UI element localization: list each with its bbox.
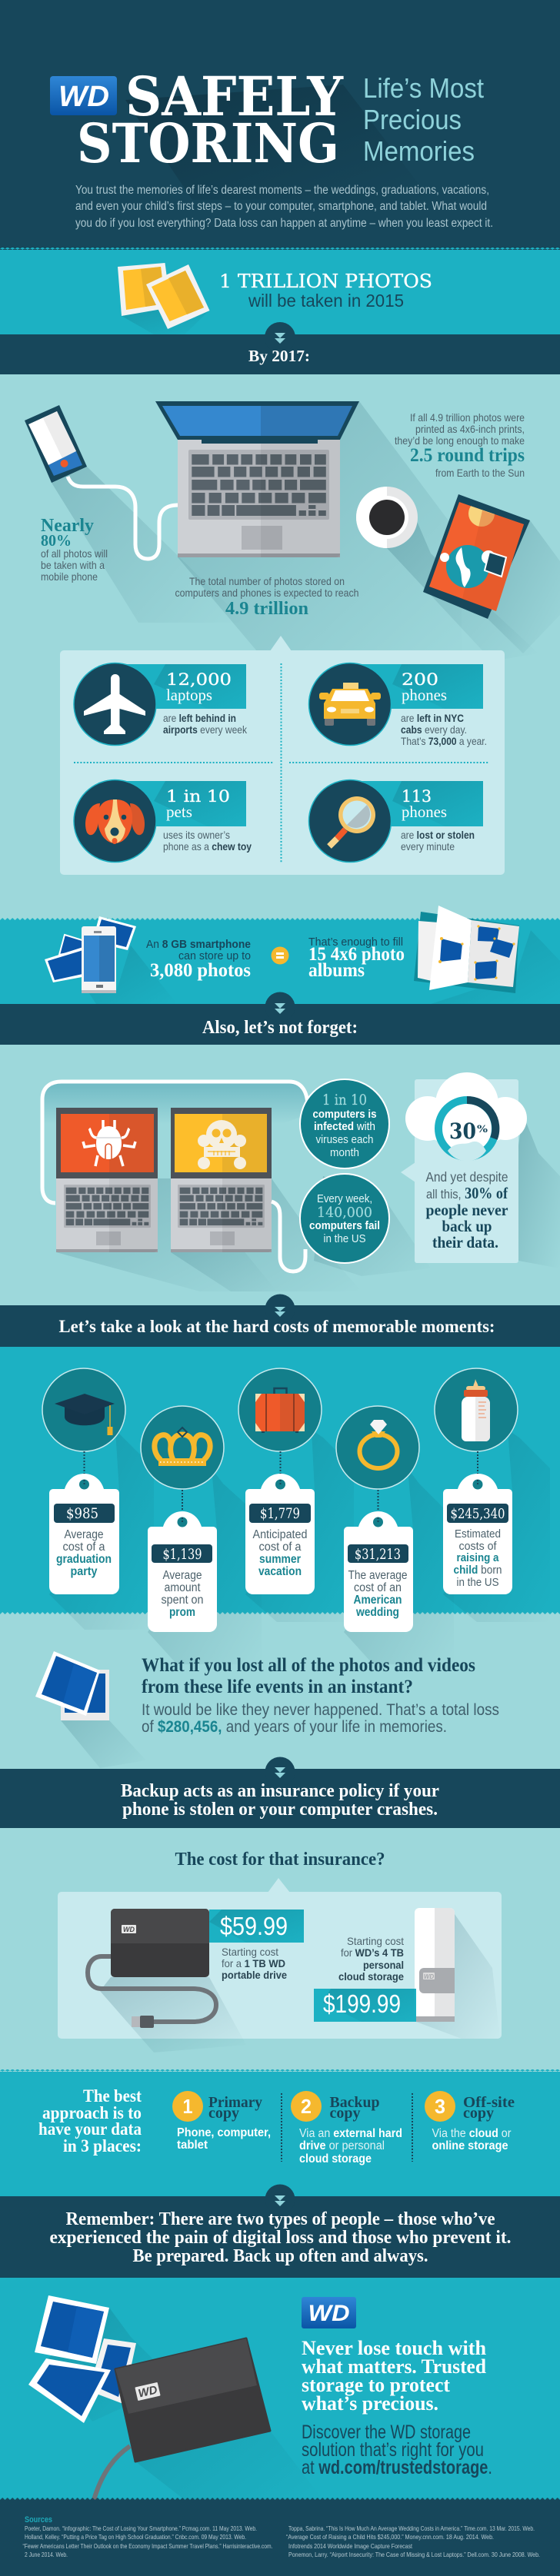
panel: remember band: experienced the pain of digital loss and those who prevent it. bbox=[49, 2228, 511, 2248]
text: total loss: It would be like they never happened. That’s a total loss bbox=[142, 1701, 499, 1719]
panel: sources footer: “Average Cost of Raising a Child Hits $245,000.” Money.cnn.com. 18 Aug. 2014. Web. bbox=[286, 2533, 494, 2541]
text: 3,080 photos: can store up to bbox=[178, 950, 251, 962]
callout: 1 in 10 computers: 1 in 10 bbox=[322, 1092, 367, 1109]
icon: stacked photos bbox=[35, 1651, 109, 1720]
heading: never lose touch: storage to protect bbox=[302, 2374, 450, 2396]
subtitle: Precious bbox=[363, 104, 462, 135]
icon: graduation cap bbox=[55, 1394, 115, 1435]
step: backup copy: cloud storage bbox=[299, 2152, 372, 2166]
panel: backup insurance band: Backup acts as an insurance policy if your bbox=[121, 1781, 439, 1801]
text: 15 photo albums: That’s enough to fill bbox=[308, 936, 403, 949]
price tag: in the US bbox=[457, 1576, 498, 1589]
icon: plane bbox=[84, 674, 145, 734]
stat: laptops at airports: airports every week bbox=[163, 723, 248, 736]
icon: cloud with donut bbox=[405, 1072, 527, 1161]
panel: closing call to action bbox=[0, 2278, 560, 2500]
panel: cost for insurance bbox=[0, 1828, 560, 2072]
price tag bbox=[344, 1511, 413, 1632]
callout: 1 in 10 computers: month bbox=[330, 1146, 359, 1159]
heading: what if: What if you lost all of the photos and videos bbox=[142, 1655, 475, 1676]
callout: 140,000 computers: computers fail bbox=[309, 1219, 380, 1232]
price tag: cost of a bbox=[63, 1541, 105, 1554]
callout: 1 in 10 computers bbox=[300, 1079, 389, 1168]
cable frame bbox=[42, 1082, 308, 1203]
icon: personal cloud: WD bbox=[424, 1973, 434, 1980]
icon: smartphone with photos bbox=[45, 916, 136, 993]
step: off-site copy: online storage bbox=[432, 2139, 508, 2152]
panel: sources footer: Sources bbox=[25, 2515, 52, 2524]
text: round trips bbox=[395, 411, 525, 479]
cost: graduation party bbox=[42, 1368, 154, 1630]
text: round trips: from Earth to the Sun bbox=[435, 467, 525, 479]
step: primary copy: copy bbox=[208, 2105, 239, 2122]
text: 15 photo albums: 15 4x6 photo bbox=[308, 944, 405, 965]
stat: lost phones: are lost or stolen bbox=[401, 829, 475, 841]
panel: header bbox=[50, 65, 493, 230]
panel: sources footer: Holland, Kelley. “Putting a Price Tag on High School Graduation.” Cnbc.com. 09 May 2013. Web. bbox=[25, 2533, 246, 2541]
stat: laptops at airports: 12,000 bbox=[166, 670, 232, 689]
text: discover: solution that’s right for you bbox=[302, 2439, 484, 2461]
callout: 30 percent never back up: 30 bbox=[449, 1118, 476, 1144]
icon: portable drive bbox=[88, 1909, 216, 2028]
subtitle: Life’s Most bbox=[363, 72, 484, 104]
icon: portable drive large: WD bbox=[137, 2383, 158, 2401]
callout: 30 percent never back up: And yet despite bbox=[426, 1169, 508, 1185]
callout: 30 percent never back up: all this, 30% of bbox=[426, 1184, 508, 1202]
text: 3,080 photos: An 8 GB smartphone bbox=[146, 939, 251, 951]
panel: hard costs heading band: Let’s take a look at the hard costs of memorable moments: bbox=[58, 1317, 495, 1336]
text: 80 percent: of all photos will bbox=[41, 547, 108, 560]
callout: 1 in 10 computers: computers is bbox=[312, 1108, 377, 1121]
price tag: wedding bbox=[355, 1606, 399, 1619]
stat: lost phones: phones bbox=[402, 803, 447, 821]
cost: American wedding bbox=[336, 1406, 454, 1664]
text: discover: at wd.com/trustedstorage. bbox=[302, 2457, 492, 2478]
heading: never lose touch: what matters. Trusted bbox=[302, 2355, 487, 2378]
step: backup copy: Backup bbox=[329, 2094, 380, 2111]
callout: 140,000 computers: 140,000 bbox=[317, 1205, 372, 1221]
step: primary copy: Primary bbox=[208, 2094, 262, 2111]
callout: 140,000 computers: Every week, bbox=[317, 1192, 372, 1205]
step: off-site copy: 3 bbox=[435, 2095, 445, 2118]
icon: laptop bbox=[155, 401, 359, 557]
heading: best approach bbox=[38, 2086, 142, 2156]
panel: remember band: Remember: There are two types of people – those who’ve bbox=[66, 2209, 495, 2229]
icon: magnifier bbox=[329, 796, 375, 846]
panel: remember band: Be prepared. Back up often and always. bbox=[132, 2246, 428, 2266]
stat: laptops at airports bbox=[74, 663, 248, 746]
icon: phone bbox=[25, 405, 87, 483]
heading: never lose touch: what’s precious. bbox=[302, 2392, 438, 2415]
text: total loss: of $280,456, and years of your life in memories. bbox=[142, 1718, 447, 1736]
price tag: Estimated bbox=[455, 1527, 501, 1541]
icon: crown bbox=[155, 1428, 210, 1466]
callout: 140,000 computers bbox=[300, 1174, 389, 1263]
stat: phones in cabs: 200 bbox=[402, 670, 438, 689]
text: 4.9 trillion: computers and phones is expected to reach bbox=[175, 587, 358, 599]
panel: also lets not forget heading band: Also, let’s not forget: bbox=[202, 1018, 358, 1038]
stat: pets bbox=[74, 779, 252, 863]
price: 199.99: for WD’s 4 TB bbox=[341, 1946, 404, 1959]
panel: also lets not forget heading band bbox=[0, 992, 560, 1045]
price tag: vacation bbox=[258, 1565, 302, 1578]
icon: tablet bbox=[423, 494, 530, 619]
heading: 1 trillion photos: 1 TRILLION PHOTOS bbox=[219, 271, 432, 292]
step: backup copy: copy bbox=[329, 2105, 360, 2122]
step: primary copy: 1 bbox=[183, 2095, 192, 2118]
text: 4.9 trillion: 4.9 trillion bbox=[225, 599, 308, 619]
stat: phones in cabs bbox=[309, 663, 487, 747]
icon: polaroid photos bbox=[118, 263, 209, 329]
price: 199.99: $199.99 bbox=[323, 1989, 401, 2018]
price tag: $985 bbox=[66, 1505, 98, 1522]
icon: portable drive: WD bbox=[123, 1926, 135, 1933]
stat: laptops at airports: are left behind in bbox=[163, 712, 236, 724]
panel: viruses and failures section bbox=[0, 1045, 560, 1305]
step: backup copy: 2 bbox=[301, 2095, 312, 2118]
stat: pets: 1 in 10 bbox=[166, 787, 230, 806]
callout: 30 percent never back up: people never bbox=[426, 1201, 508, 1219]
price tag: costs of bbox=[458, 1540, 497, 1553]
cost: raising a child bbox=[435, 1368, 550, 1622]
text: 3,080 photos: 3,080 photos bbox=[150, 960, 251, 981]
icon: photos bbox=[28, 2295, 136, 2423]
icon: laptop with skull bbox=[171, 1108, 272, 1252]
panel: hard costs bbox=[0, 1347, 560, 1860]
step: off-site copy bbox=[425, 2091, 515, 2152]
stat: phones in cabs: That’s 73,000 a year. bbox=[401, 735, 487, 747]
callout: 30 percent never back up: back up bbox=[442, 1217, 492, 1235]
price tag bbox=[49, 1474, 119, 1594]
price tag: graduation bbox=[56, 1553, 112, 1566]
arrow connector 1 bbox=[265, 322, 295, 353]
price tag: amount bbox=[165, 1581, 201, 1594]
subtitle: Memories bbox=[363, 135, 475, 167]
heading: best approach: approach is to bbox=[42, 2103, 142, 2122]
panel: sources footer bbox=[0, 2498, 560, 2576]
callout: 140,000 computers: in the US bbox=[323, 1232, 366, 1245]
price tag: cost of an bbox=[354, 1581, 402, 1594]
step: primary copy bbox=[172, 2091, 271, 2152]
heading: best approach: have your data bbox=[38, 2119, 142, 2139]
step: primary copy: Phone, computer, bbox=[177, 2126, 271, 2139]
text: 80 percent: be taken with a bbox=[41, 559, 105, 571]
price: 199.99: cloud storage bbox=[338, 1970, 404, 1983]
price: 59.99: $59.99 bbox=[220, 1912, 288, 1940]
WD logo small: WD bbox=[308, 2301, 349, 2326]
WD logo: WD bbox=[58, 81, 109, 113]
price: 199.99 bbox=[314, 1935, 416, 2022]
price: 199.99: Starting cost bbox=[347, 1935, 404, 1947]
panel: sources footer: Infotrends 2014 Worldwide Image Capture Forecast bbox=[288, 2542, 413, 2550]
panel: backup insurance band: phone is stolen or your computer crashes. bbox=[122, 1800, 438, 1820]
price tag: $31,213 bbox=[355, 1546, 401, 1563]
text: 80 percent: Nearly bbox=[41, 516, 94, 536]
callout: 1 in 10 computers: infected with bbox=[314, 1120, 375, 1133]
cost: prom bbox=[141, 1406, 262, 1664]
heading: what if bbox=[142, 1655, 475, 1697]
cable bbox=[68, 477, 178, 559]
step: backup copy bbox=[291, 2091, 402, 2166]
price tag: The average bbox=[348, 1569, 408, 1582]
stat: phones in cabs: phones bbox=[402, 686, 447, 704]
text: 4.9 trillion: The total number of photos stored on bbox=[189, 575, 345, 587]
callout: 30 percent never back up: their data. bbox=[432, 1233, 498, 1251]
text: round trips: If all 4.9 trillion photos were bbox=[410, 411, 525, 424]
price tag: Average bbox=[163, 1569, 202, 1582]
text: discover: Discover the WD storage bbox=[302, 2421, 471, 2443]
heading: never lose touch bbox=[302, 2337, 487, 2415]
price tag: cost of a bbox=[258, 1541, 302, 1554]
panel: 1 trillion photos band bbox=[0, 248, 560, 334]
panel: three places band bbox=[0, 2069, 560, 2196]
subtitle bbox=[363, 72, 484, 167]
panel: sources footer: 2 June 2014. Web. bbox=[25, 2551, 68, 2558]
stat: pets: phone as a chew toy bbox=[163, 840, 252, 853]
heading: never lose touch: Never lose touch with bbox=[302, 2337, 487, 2359]
text: total loss bbox=[142, 1701, 499, 1736]
icon: equals bbox=[271, 947, 289, 964]
panel: hard costs heading band bbox=[0, 1295, 560, 1347]
panel: sources footer: “Fewer Americans Letter Their Outlook on the Economy Impact Summer Travel Plans.” Harrisinteractive.com. bbox=[23, 2542, 272, 2550]
text: 15 photo albums: albums bbox=[308, 960, 365, 981]
heading: cost for that insurance: The cost for that insurance? bbox=[175, 1850, 385, 1870]
icon: skull bbox=[198, 1120, 246, 1169]
heading: 1 trillion photos: will be taken in 2015 bbox=[248, 291, 404, 311]
icon: dog bbox=[85, 799, 145, 844]
icon: portable drive large bbox=[94, 2338, 270, 2500]
text: 80 percent: 80% bbox=[41, 531, 72, 550]
heading: by 2017: By 2017: bbox=[248, 347, 310, 365]
heading: best approach: The best bbox=[83, 2086, 142, 2106]
icon: personal cloud bbox=[415, 1908, 455, 2022]
price tag: Anticipated bbox=[252, 1528, 308, 1541]
price tag: summer bbox=[259, 1553, 301, 1566]
WD logo bbox=[50, 76, 117, 115]
cost: summer vacation bbox=[238, 1368, 354, 1622]
price tag: spent on bbox=[162, 1594, 203, 1607]
heading: best approach: in 3 places: bbox=[63, 2136, 142, 2156]
intro text: You trust the memories of life’s dearest moments – the weddings, graduations, vacations, bbox=[75, 184, 489, 197]
price tag: $1,779 bbox=[260, 1505, 300, 1522]
step: primary copy: tablet bbox=[177, 2139, 208, 2152]
text: round trips: printed as 4x6-inch prints, bbox=[415, 423, 525, 435]
title: STORING bbox=[77, 111, 339, 175]
stat: lost phones: 113 bbox=[402, 787, 432, 806]
price tag bbox=[148, 1511, 217, 1632]
stat: pets: pets bbox=[166, 803, 192, 821]
panel: sources footer: Poeter, Damon. “Infographic: The Cost of Losing Your Smartphone.” Pcmag.com. 11 May 2013. Web. bbox=[25, 2524, 257, 2532]
intro text: you do if you lost everything? Data loss can happen at anytime – when you least expect it. bbox=[75, 217, 493, 230]
intro text bbox=[75, 184, 493, 230]
text: discover bbox=[302, 2421, 492, 2478]
step: off-site copy: Via the cloud or bbox=[432, 2127, 511, 2140]
WD logo small bbox=[302, 2297, 356, 2328]
step: backup copy: drive or personal bbox=[299, 2139, 385, 2152]
right cable bbox=[272, 1202, 305, 1271]
callout: 30 percent never back up bbox=[401, 1072, 560, 1268]
text: round trips: 2.5 round trips bbox=[410, 445, 525, 466]
text: 4.9 trillion bbox=[175, 575, 358, 619]
icon: taxi bbox=[319, 683, 381, 726]
title: SAFELY bbox=[125, 65, 344, 128]
price tag: raising a bbox=[457, 1551, 499, 1564]
icon: photo album bbox=[414, 906, 519, 993]
panel: smartphone storage band bbox=[0, 906, 560, 1004]
price: 59.99: Starting cost bbox=[222, 1946, 278, 1958]
price tag: child born bbox=[454, 1564, 502, 1577]
icon: baby bottle bbox=[462, 1379, 490, 1441]
price: 59.99: for a 1 TB WD bbox=[222, 1957, 285, 1969]
price: 59.99: portable drive bbox=[222, 1969, 287, 1981]
title bbox=[77, 65, 344, 175]
step: off-site copy: Off-site bbox=[463, 2094, 515, 2111]
price: 199.99: personal bbox=[363, 1959, 404, 1971]
text: 80 percent bbox=[41, 516, 108, 583]
step: backup copy: Via an external hard bbox=[299, 2127, 402, 2140]
text: round trips: they’d be long enough to make bbox=[395, 434, 525, 447]
price tag: Average bbox=[65, 1528, 103, 1541]
heading: 1 trillion photos bbox=[219, 271, 432, 311]
step: off-site copy: copy bbox=[463, 2105, 494, 2122]
stat: laptops at airports: laptops bbox=[166, 686, 212, 704]
callout: 30 percent never back up: % bbox=[477, 1124, 488, 1135]
price tag: American bbox=[354, 1594, 402, 1607]
stat: lost phones bbox=[309, 779, 483, 863]
icon: ring bbox=[360, 1420, 397, 1468]
stat: phones in cabs: cabs every day. bbox=[401, 723, 467, 736]
stat: lost phones: every minute bbox=[401, 840, 455, 853]
panel: backup insurance band bbox=[0, 1757, 560, 1828]
icon: laptop with bug bbox=[56, 1108, 158, 1252]
panel: remember band bbox=[0, 2185, 560, 2278]
price tag bbox=[245, 1474, 315, 1594]
title shadow bbox=[125, 85, 431, 200]
text: 15 photo albums bbox=[308, 936, 405, 981]
stat: phones in cabs: are left in NYC bbox=[401, 712, 464, 724]
price: 59.99 bbox=[209, 1910, 304, 1981]
callout: 1 in 10 computers: viruses each bbox=[315, 1133, 374, 1146]
icon: coffee cup bbox=[356, 487, 418, 548]
panel: what if you lost bbox=[35, 1651, 499, 1768]
icon: suitcase bbox=[255, 1388, 305, 1433]
price tag bbox=[443, 1474, 512, 1594]
icon: bug bbox=[83, 1120, 135, 1166]
stat: pets: uses its owner’s bbox=[163, 829, 230, 841]
text: 80 percent: mobile phone bbox=[41, 570, 98, 583]
panel: lost devices bbox=[60, 636, 505, 875]
intro text: and even your child’s first steps – to your computer, smartphone, and tablet. What would bbox=[75, 200, 487, 213]
price tag: prom bbox=[169, 1606, 195, 1619]
text: 3,080 photos bbox=[146, 939, 251, 981]
price tag: $1,139 bbox=[163, 1546, 202, 1563]
price tag: $245,340 bbox=[451, 1506, 505, 1522]
heading: what if: from these life events in an instant? bbox=[142, 1677, 413, 1697]
price tag: party bbox=[71, 1565, 98, 1578]
